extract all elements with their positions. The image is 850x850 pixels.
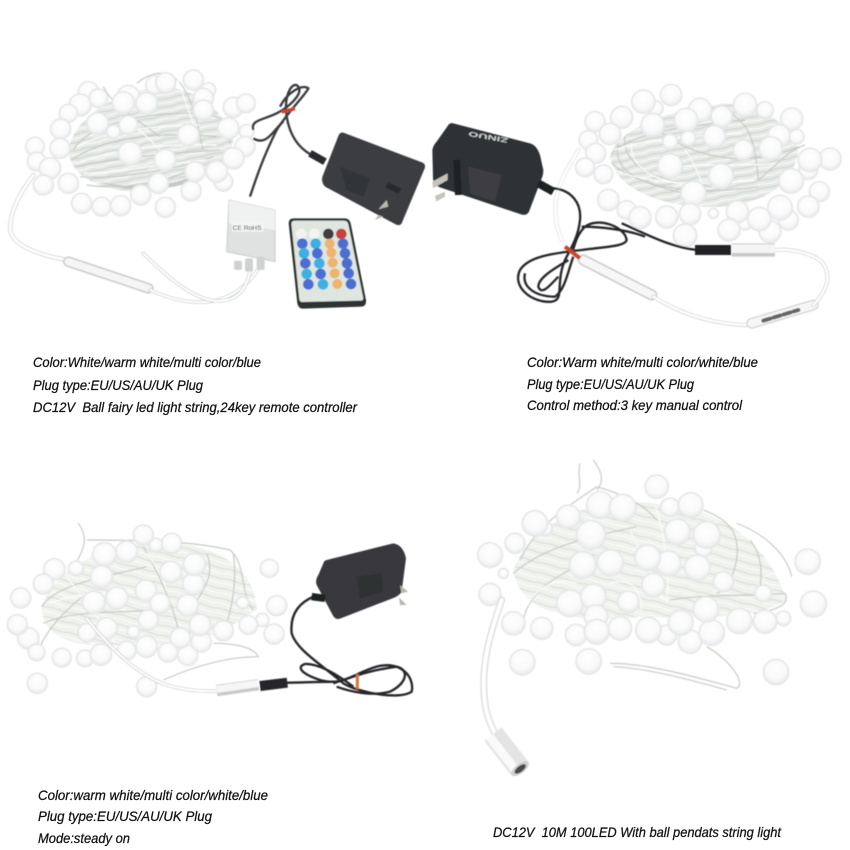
red cable tie	[282, 109, 295, 112]
caption: manual control set: Control method:3 key manual control	[527, 397, 743, 413]
string of ball lights	[26, 70, 255, 217]
power adapter: ZINUO	[468, 129, 509, 143]
power adapter	[310, 132, 425, 225]
white cable	[484, 600, 502, 737]
24-key remote control	[289, 218, 366, 309]
string of ball lights	[576, 84, 841, 247]
panel: light string with 3-key manual control	[432, 84, 841, 413]
caption: remote set: Color:White/warm white/multi color/blue	[33, 354, 261, 370]
caption: remote set: Plug type:EU/US/AU/UK Plug	[33, 377, 203, 393]
panel: steady-on light string	[7, 523, 412, 846]
caption: manual control set: Color:Warm white/multi color/white/blue	[527, 354, 758, 370]
IR controller box: CE RoHS	[233, 225, 262, 232]
panel: 10M 100LED string close-up	[478, 460, 826, 840]
photo: manual-control string set	[432, 84, 841, 325]
photo: remote-controlled string set	[10, 70, 425, 309]
white cable, connectors and 3-key controller	[555, 150, 827, 325]
caption: remote set: DC12V Ball fairy led light string,24key remote controller	[33, 399, 358, 415]
red cable tie	[353, 674, 362, 689]
black plug and cord	[260, 596, 412, 695]
IR controller box	[227, 200, 275, 272]
photo: close-up string	[478, 460, 826, 779]
caption: steady-on set	[38, 787, 268, 846]
string of ball lights	[478, 475, 826, 685]
wire bundle	[68, 73, 233, 192]
caption: steady-on set: Plug type:EU/US/AU/UK Plug	[38, 808, 212, 824]
wire bundle	[610, 103, 805, 207]
white cable and connector	[87, 618, 258, 691]
black power cord	[250, 85, 315, 197]
wire bundle	[38, 523, 275, 680]
photo: steady-on string set	[7, 523, 412, 697]
black power cord	[518, 188, 697, 302]
DC connector	[484, 727, 532, 779]
power adapter	[312, 543, 408, 619]
power adapter	[432, 123, 553, 215]
string of ball lights	[7, 525, 287, 697]
caption: manual control set	[527, 354, 758, 413]
panel: light string with 24-key remote controller	[10, 70, 425, 415]
wire bundle	[513, 460, 792, 690]
caption: steady-on set: Mode:steady on	[38, 830, 130, 846]
caption: remote set	[33, 354, 358, 415]
white cable and connector	[10, 175, 262, 302]
caption: steady-on set: Color:warm white/multi color/white/blue	[38, 787, 268, 803]
caption: close-up string: DC12V 10M 100LED With ball pendats string light	[493, 824, 782, 840]
black plug	[695, 235, 731, 265]
caption: manual control set: Plug type:EU/US/AU/UK Plug	[527, 376, 694, 392]
red cable tie	[565, 247, 580, 258]
